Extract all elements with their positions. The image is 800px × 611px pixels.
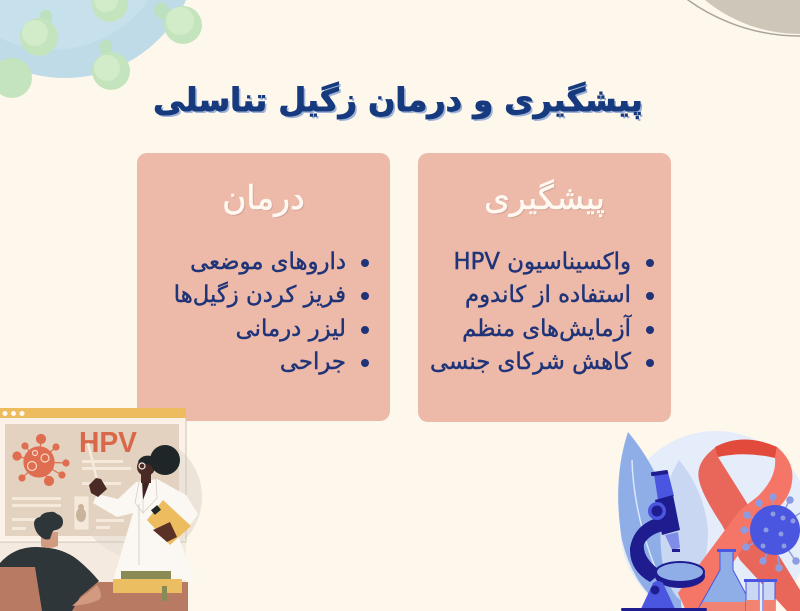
list item: لیزر درمانی [236, 316, 346, 342]
panel: prevention [418, 153, 671, 422]
icon: virus [13, 434, 69, 486]
microscope [621, 470, 707, 611]
flask [697, 549, 748, 611]
list item: استفاده از کاندوم [465, 282, 631, 308]
test tubes [744, 579, 777, 611]
heading: treatment: درمان [222, 178, 305, 217]
list item: جراحی [280, 349, 346, 375]
list item: کاهش شرکای جنسی [430, 349, 631, 375]
doctor [89, 445, 198, 580]
desk and books [70, 582, 188, 611]
list item: داروهای موضعی [190, 249, 346, 275]
heading: prevention: پیشگیری [484, 178, 605, 217]
ribbon [678, 440, 800, 611]
leaves [618, 432, 682, 611]
man [0, 547, 99, 611]
list item: واکسیناسیون HPV [454, 249, 631, 275]
panel: treatment [137, 153, 390, 421]
icon: virus [741, 494, 800, 571]
pointer [88, 443, 97, 480]
list item: فریز کردن زگیل‌ها [174, 282, 346, 308]
list item: آزمایش‌های منظم [462, 316, 631, 342]
HPV label: HPV [79, 427, 138, 459]
title: پیشگیری و درمان زگیل تناسلی [153, 81, 643, 119]
